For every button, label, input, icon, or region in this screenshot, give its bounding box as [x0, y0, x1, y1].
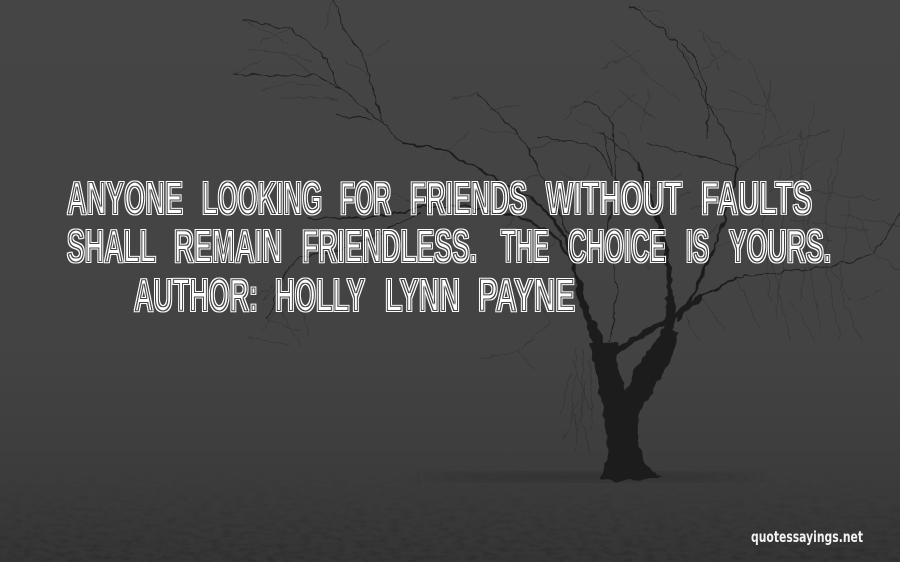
trunk — [589, 328, 678, 481]
line 1: FRIENDS — [410, 172, 527, 224]
line 2: FRIENDLESS. — [302, 220, 477, 272]
line 1: FOR — [340, 172, 391, 224]
line 2: THE — [501, 220, 549, 272]
line 2: REMAIN — [174, 220, 282, 272]
author line: AUTHOR: — [134, 269, 258, 321]
thin branches — [233, 0, 900, 340]
line 2: SHALL — [67, 220, 156, 272]
author line: PAYNE — [478, 269, 575, 321]
line 1: ANYONE — [67, 172, 183, 224]
ground texture — [70, 548, 840, 561]
author line: HOLLY — [275, 269, 365, 321]
main limbs — [307, 143, 737, 352]
line 2: IS — [686, 220, 709, 272]
line 1: WITHOUT — [546, 172, 682, 224]
quote text — [67, 172, 831, 321]
tree — [233, 0, 900, 481]
ground shadow — [420, 472, 760, 482]
author line: LYNN — [385, 269, 460, 321]
line 1: LOOKING — [202, 172, 322, 224]
line 2: CHOICE — [568, 220, 666, 272]
faint twigs — [233, 0, 900, 455]
line 1: FAULTS — [701, 172, 812, 224]
